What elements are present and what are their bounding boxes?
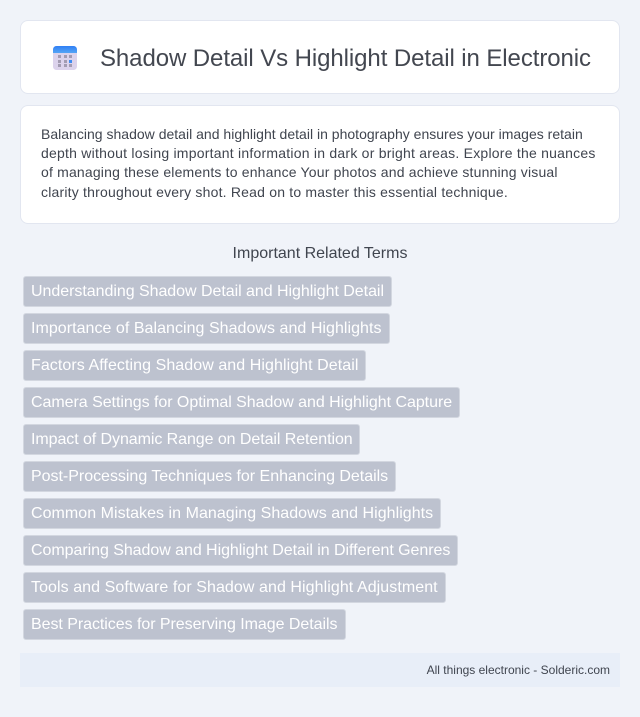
intro text: Balancing shadow detail and highlight detail in photography ensures your images retain (41, 126, 583, 142)
tag 3: Factors Affecting Shadow and Highlight Detail (31, 357, 358, 374)
tag 8 (23, 535, 458, 566)
icon: calendar (53, 46, 77, 70)
tag 7 (23, 498, 441, 529)
tag 10: Best Practices for Preserving Image Details (31, 616, 337, 633)
intro text: depth without losing important information in dark or bright areas. Explore the nuances (41, 145, 596, 161)
intro text: of managing these elements to enhance Your photos and achieve stunning visual (41, 164, 558, 180)
tag 4 (23, 387, 460, 418)
tag 5: Impact of Dynamic Range on Detail Retention (31, 431, 353, 448)
tag 3 (23, 350, 366, 381)
tag 8: Comparing Shadow and Highlight Detail in Different Genres (31, 542, 450, 559)
tag 2 (23, 313, 390, 344)
tag 6: Post-Processing Techniques for Enhancing Details (31, 468, 388, 485)
tag 6 (23, 461, 396, 492)
tag 9 (23, 572, 446, 603)
tag 7: Common Mistakes in Managing Shadows and Highlights (31, 505, 433, 522)
title: Shadow Detail Vs Highlight Detail in Electronic (100, 45, 591, 72)
panel: intro card (20, 105, 620, 224)
footer: All things electronic - Solderic.com (427, 663, 610, 677)
footer (20, 653, 620, 687)
tag 4: Camera Settings for Optimal Shadow and Highlight Capture (31, 394, 452, 411)
heading: related terms: Important Related Terms (233, 245, 407, 262)
intro text: clarity throughout every shot. Read on to master this essential technique. (41, 184, 508, 200)
tag 10 (23, 609, 346, 640)
tag 1 (23, 276, 392, 307)
tag 1: Understanding Shadow Detail and Highlight Detail (31, 283, 384, 300)
panel: title card (20, 20, 620, 94)
intro text (41, 126, 596, 200)
tag 9: Tools and Software for Shadow and Highlight Adjustment (31, 579, 438, 596)
tag 5 (23, 424, 360, 455)
tag 2: Importance of Balancing Shadows and Highlights (31, 320, 382, 337)
